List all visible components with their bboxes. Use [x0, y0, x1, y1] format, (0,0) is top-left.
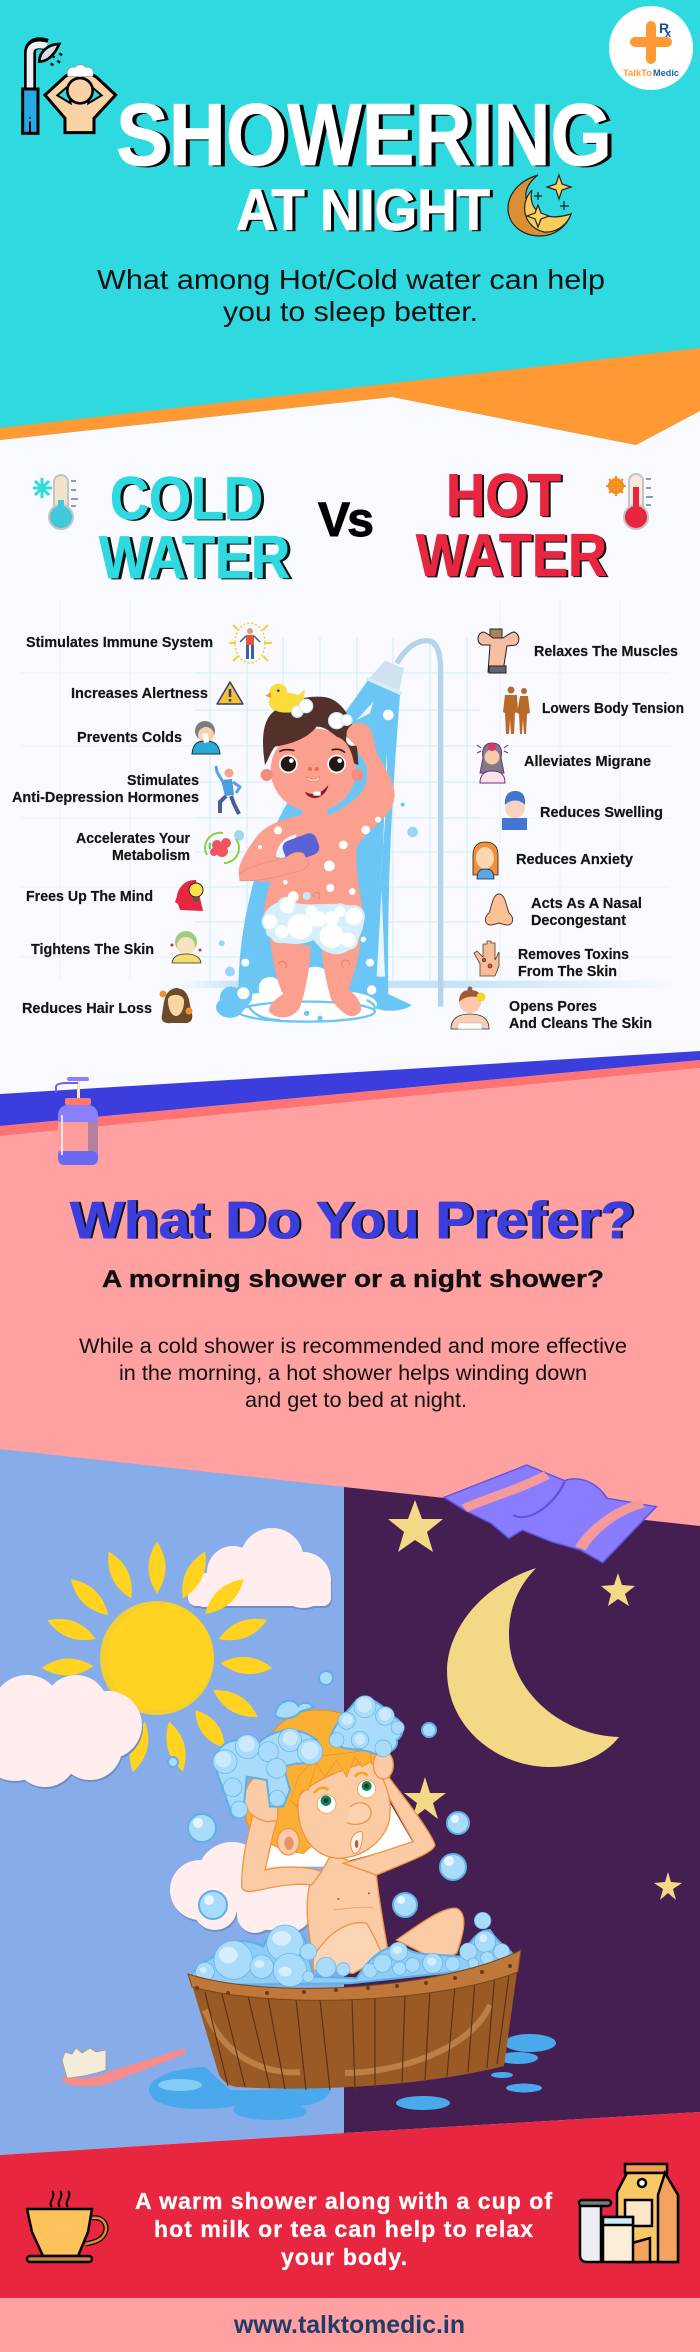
tile wall background	[195, 638, 480, 984]
sponge	[276, 831, 321, 864]
orange ribbon	[0, 348, 700, 445]
crescent moon	[447, 1568, 619, 1767]
stars	[388, 1500, 682, 1900]
hot water benefit labels: Decongestant	[531, 912, 626, 929]
icon: body silhouettes	[503, 686, 530, 734]
baby raised hand	[346, 723, 372, 747]
logo: TalkToMedic: Medic	[653, 68, 679, 79]
hot water benefit labels: Acts As A Nasal	[531, 895, 642, 912]
coral ribbon	[0, 1060, 700, 1136]
illustration: boy in tub	[190, 1696, 517, 1987]
icon: face with green hair	[170, 931, 202, 963]
heading: Cold Water	[99, 465, 290, 591]
paragraph: and get to bed at night.	[245, 1389, 467, 1412]
cold water benefit labels: Frees Up The Mind	[26, 888, 153, 905]
icon: nose	[485, 894, 513, 925]
paragraph	[79, 1335, 627, 1412]
logo: TalkToMedic: R	[659, 20, 669, 36]
heading: Cold Water: WATER	[99, 524, 290, 591]
boy hair	[246, 1710, 390, 1853]
floor band	[180, 981, 680, 988]
logo: TalkToMedic: x	[665, 28, 672, 40]
icon: muscles	[478, 629, 519, 673]
panel: night sky	[344, 1487, 700, 2133]
paragraph: While a cold shower is recommended and more effective	[79, 1335, 627, 1358]
panel: daytime sky	[0, 1449, 344, 2155]
hot water benefit labels: From The Skin	[518, 963, 617, 980]
ear	[277, 1828, 299, 1855]
baby hand and forearm	[239, 852, 309, 881]
foam around waist	[262, 891, 365, 954]
icon: sneezing person	[192, 721, 220, 754]
shower head	[366, 661, 404, 696]
icon: anxious woman	[473, 842, 498, 879]
tip text: hot milk or tea can help to relax	[154, 2216, 533, 2242]
subtitle: What among Hot/Cold water can help	[97, 264, 605, 295]
subtitle	[97, 264, 605, 327]
cold water benefit labels: Accelerates Your	[76, 830, 190, 847]
cloud: lower	[170, 1842, 312, 1933]
hot water benefit labels: Reduces Anxiety	[516, 851, 634, 868]
footer URL: www.talktomedic.in	[233, 2311, 465, 2339]
icon: head with light bulb	[175, 880, 203, 911]
icon: soap bottle	[56, 1077, 98, 1165]
subheading: A morning shower or a night shower?	[102, 1266, 604, 1293]
hair foam	[213, 1696, 404, 1818]
icon: swollen face	[502, 791, 527, 830]
torso	[307, 1857, 388, 1962]
baby legs	[269, 937, 311, 1017]
icon: person showering	[23, 43, 116, 133]
heading: Hot Water: WATER	[416, 522, 607, 589]
tip text: A warm shower along with a cup of	[135, 2188, 552, 2214]
tub foam bubbles	[196, 1912, 510, 1987]
icon: immune system	[229, 623, 272, 663]
icon: alert triangle	[217, 682, 243, 704]
panel: white comparison background	[0, 397, 700, 1130]
foam on head	[292, 699, 359, 745]
icon: metabolism	[205, 830, 244, 863]
cold water benefit labels: Metabolism	[112, 847, 190, 864]
hot water benefit labels: Opens Pores	[509, 998, 597, 1015]
heading: Hot Water: HOT	[446, 462, 561, 529]
panel: top teal header background	[0, 0, 700, 445]
arms	[242, 1813, 322, 1891]
hot water benefit labels: Alleviates Migrane	[524, 753, 651, 770]
title: At Night: AT NIGHT	[236, 178, 490, 243]
tip text	[135, 2188, 552, 2270]
hot water benefit labels: Lowers Body Tension	[542, 700, 684, 717]
hot water benefit labels	[509, 643, 684, 1032]
icon: crescent moon with stars	[508, 175, 571, 236]
cold water benefit labels: Stimulates Immune System	[26, 634, 213, 651]
cloud: upper	[188, 1528, 331, 1608]
heading: Hot Water	[416, 462, 607, 589]
puddle: left	[149, 2067, 330, 2120]
hot water benefit labels: And Cleans The Skin	[509, 1015, 652, 1032]
hot water benefit labels: Removes Toxins	[518, 946, 629, 963]
sun	[41, 1542, 273, 1774]
heading: Cold Water: COLD	[110, 465, 263, 532]
subtitle: you to sleep better.	[223, 296, 478, 327]
paragraph: in the morning, a hot shower helps winding down	[119, 1362, 587, 1385]
cold water benefit labels: Reduces Hair Loss	[22, 1000, 152, 1017]
icon: hand with rash	[474, 941, 499, 976]
logo: TalkToMedic	[609, 6, 693, 90]
hands	[244, 1773, 278, 1822]
illustration: baby in shower	[180, 641, 680, 1023]
wooden tub	[188, 1950, 521, 2090]
icon: migraine woman	[477, 743, 508, 783]
icon: milk cartons	[579, 2164, 678, 2262]
puddles: right	[396, 2034, 556, 2110]
cold water benefit labels: Anti-Depression Hormones	[12, 789, 199, 806]
panel: red tip band	[0, 2112, 700, 2298]
towel	[444, 1465, 656, 1563]
panel: pink preference background	[0, 1068, 700, 1550]
heading: Vs: Vs	[318, 494, 374, 547]
cold water benefit labels: Stimulates	[127, 772, 199, 789]
floating bubbles	[168, 1671, 469, 1919]
title: Showering: SHOWERING	[116, 85, 612, 184]
cold water benefit labels: Prevents Colds	[77, 729, 182, 746]
hot water benefit labels: Reduces Swelling	[540, 804, 663, 821]
cold water benefit labels: Tightens The Skin	[31, 941, 154, 958]
icon: tea cup	[27, 2191, 106, 2262]
toothbrush	[62, 2048, 185, 2086]
tub foam	[190, 1928, 517, 1985]
baby torso	[239, 808, 364, 923]
heading: What Do You Prefer: What Do You Prefer?	[70, 1192, 635, 1250]
hot water benefit labels: Relaxes The Muscles	[534, 643, 678, 660]
water splash pool	[213, 967, 412, 1023]
face	[298, 1762, 390, 1858]
baby raised arm	[327, 723, 395, 847]
icon: cold thermometer	[33, 475, 78, 529]
tip text: your body.	[281, 2244, 407, 2270]
icon: dancing person	[216, 766, 240, 814]
bubbles on baby	[241, 710, 394, 967]
icon: long hair woman	[160, 988, 192, 1023]
panel: footer	[0, 2298, 700, 2352]
cold water benefit labels: Increases Alertness	[71, 685, 208, 702]
water stream	[238, 681, 400, 995]
icon: hot thermometer	[606, 474, 653, 529]
rubber duck	[265, 684, 305, 713]
icon: woman in towel with flower	[451, 986, 489, 1029]
logo: TalkToMedic: TalkTo	[623, 68, 652, 79]
cloud: left	[0, 1675, 142, 1787]
cold water benefit labels	[12, 634, 213, 1017]
shower pipe	[397, 641, 441, 1007]
baby head	[271, 728, 356, 812]
blue ribbon	[0, 1051, 700, 1126]
towel behind boy	[263, 1780, 413, 1867]
legs	[397, 1908, 464, 1962]
